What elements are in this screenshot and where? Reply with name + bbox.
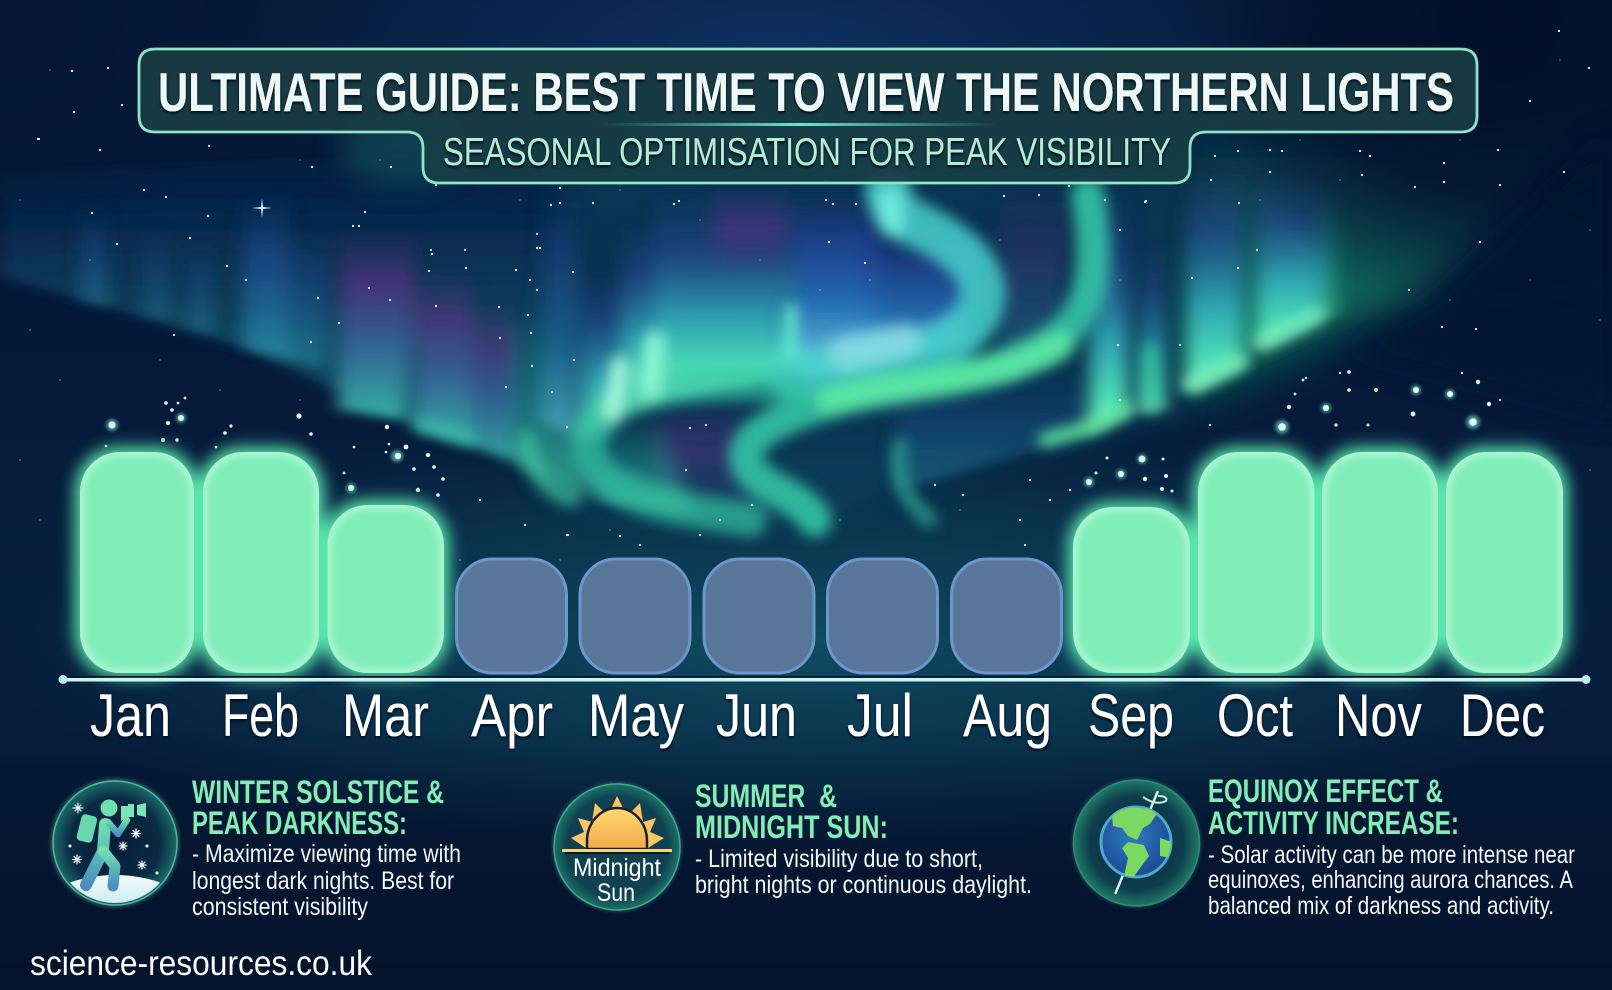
body text: longest dark nights. Best for [192, 867, 454, 895]
bar: Feb [203, 452, 319, 673]
timeline axis [58, 675, 1590, 684]
bar: Mar [328, 505, 444, 673]
month labels: Oct [1217, 682, 1293, 749]
month labels: May [588, 682, 684, 749]
star: bright spike [252, 198, 272, 218]
month labels: Feb [222, 682, 299, 749]
bar: Apr [456, 559, 566, 673]
heading: WINTER SOLSTICE & [192, 774, 444, 810]
body text [1208, 841, 1575, 920]
month labels: Jul [847, 682, 913, 749]
month labels: Dec [1460, 682, 1545, 749]
body text [192, 840, 461, 921]
bar: Aug [952, 559, 1062, 673]
heading [192, 774, 444, 841]
month labels: Jan [90, 682, 171, 749]
bar: Jan [80, 452, 194, 673]
month labels: Apr [471, 682, 553, 749]
body text [695, 845, 1032, 899]
heading: EQUINOX EFFECT & [1208, 773, 1443, 809]
icon: hiker with camera in snow [48, 776, 182, 910]
icon: tilted globe [1072, 778, 1202, 908]
bar: Oct [1198, 452, 1314, 673]
heading: SUMMER & [695, 778, 837, 814]
body text: - Maximize viewing time with [192, 840, 461, 868]
stars: sparkles above bars [105, 370, 1491, 497]
bar chart: monthly visibility [75, 447, 1568, 677]
icon: midnight sun: Sun [597, 879, 635, 907]
body text: - Limited visibility due to short, [695, 845, 983, 873]
stars [20, 31, 1600, 570]
heading: MIDNIGHT SUN: [695, 809, 888, 845]
month labels: Aug [963, 682, 1052, 749]
bar: Sep [1073, 507, 1190, 673]
body text: consistent visibility [192, 893, 368, 921]
bar: Dec [1446, 452, 1563, 673]
panel: summer and midnight sun [552, 778, 1032, 912]
glow behind bright bars [75, 447, 1568, 677]
title banner [139, 49, 1477, 183]
icon: midnight sun: Midnight [573, 854, 661, 882]
icon: midnight sun [552, 782, 682, 912]
heading: PEAK DARKNESS: [192, 805, 407, 841]
heading [695, 778, 888, 845]
bar: May [580, 559, 690, 673]
footer: website credit: science-resources.co.uk [30, 944, 372, 983]
bar: Jul [828, 559, 938, 673]
month labels: Nov [1335, 682, 1422, 749]
heading [1208, 773, 1459, 841]
bar: Jun [704, 559, 814, 673]
month labels [90, 682, 1545, 749]
month labels: Mar [342, 682, 429, 749]
panel: equinox effect [1072, 773, 1575, 920]
month labels: Jun [716, 682, 797, 749]
bar: Nov [1322, 452, 1438, 673]
panel: winter solstice [48, 776, 460, 920]
subtitle text: SEASONAL OPTIMISATION FOR PEAK VISIBILITY [443, 131, 1171, 174]
body text: bright nights or continuous daylight. [695, 871, 1032, 899]
month labels: Sep [1088, 682, 1174, 749]
heading: ACTIVITY INCREASE: [1208, 805, 1459, 841]
